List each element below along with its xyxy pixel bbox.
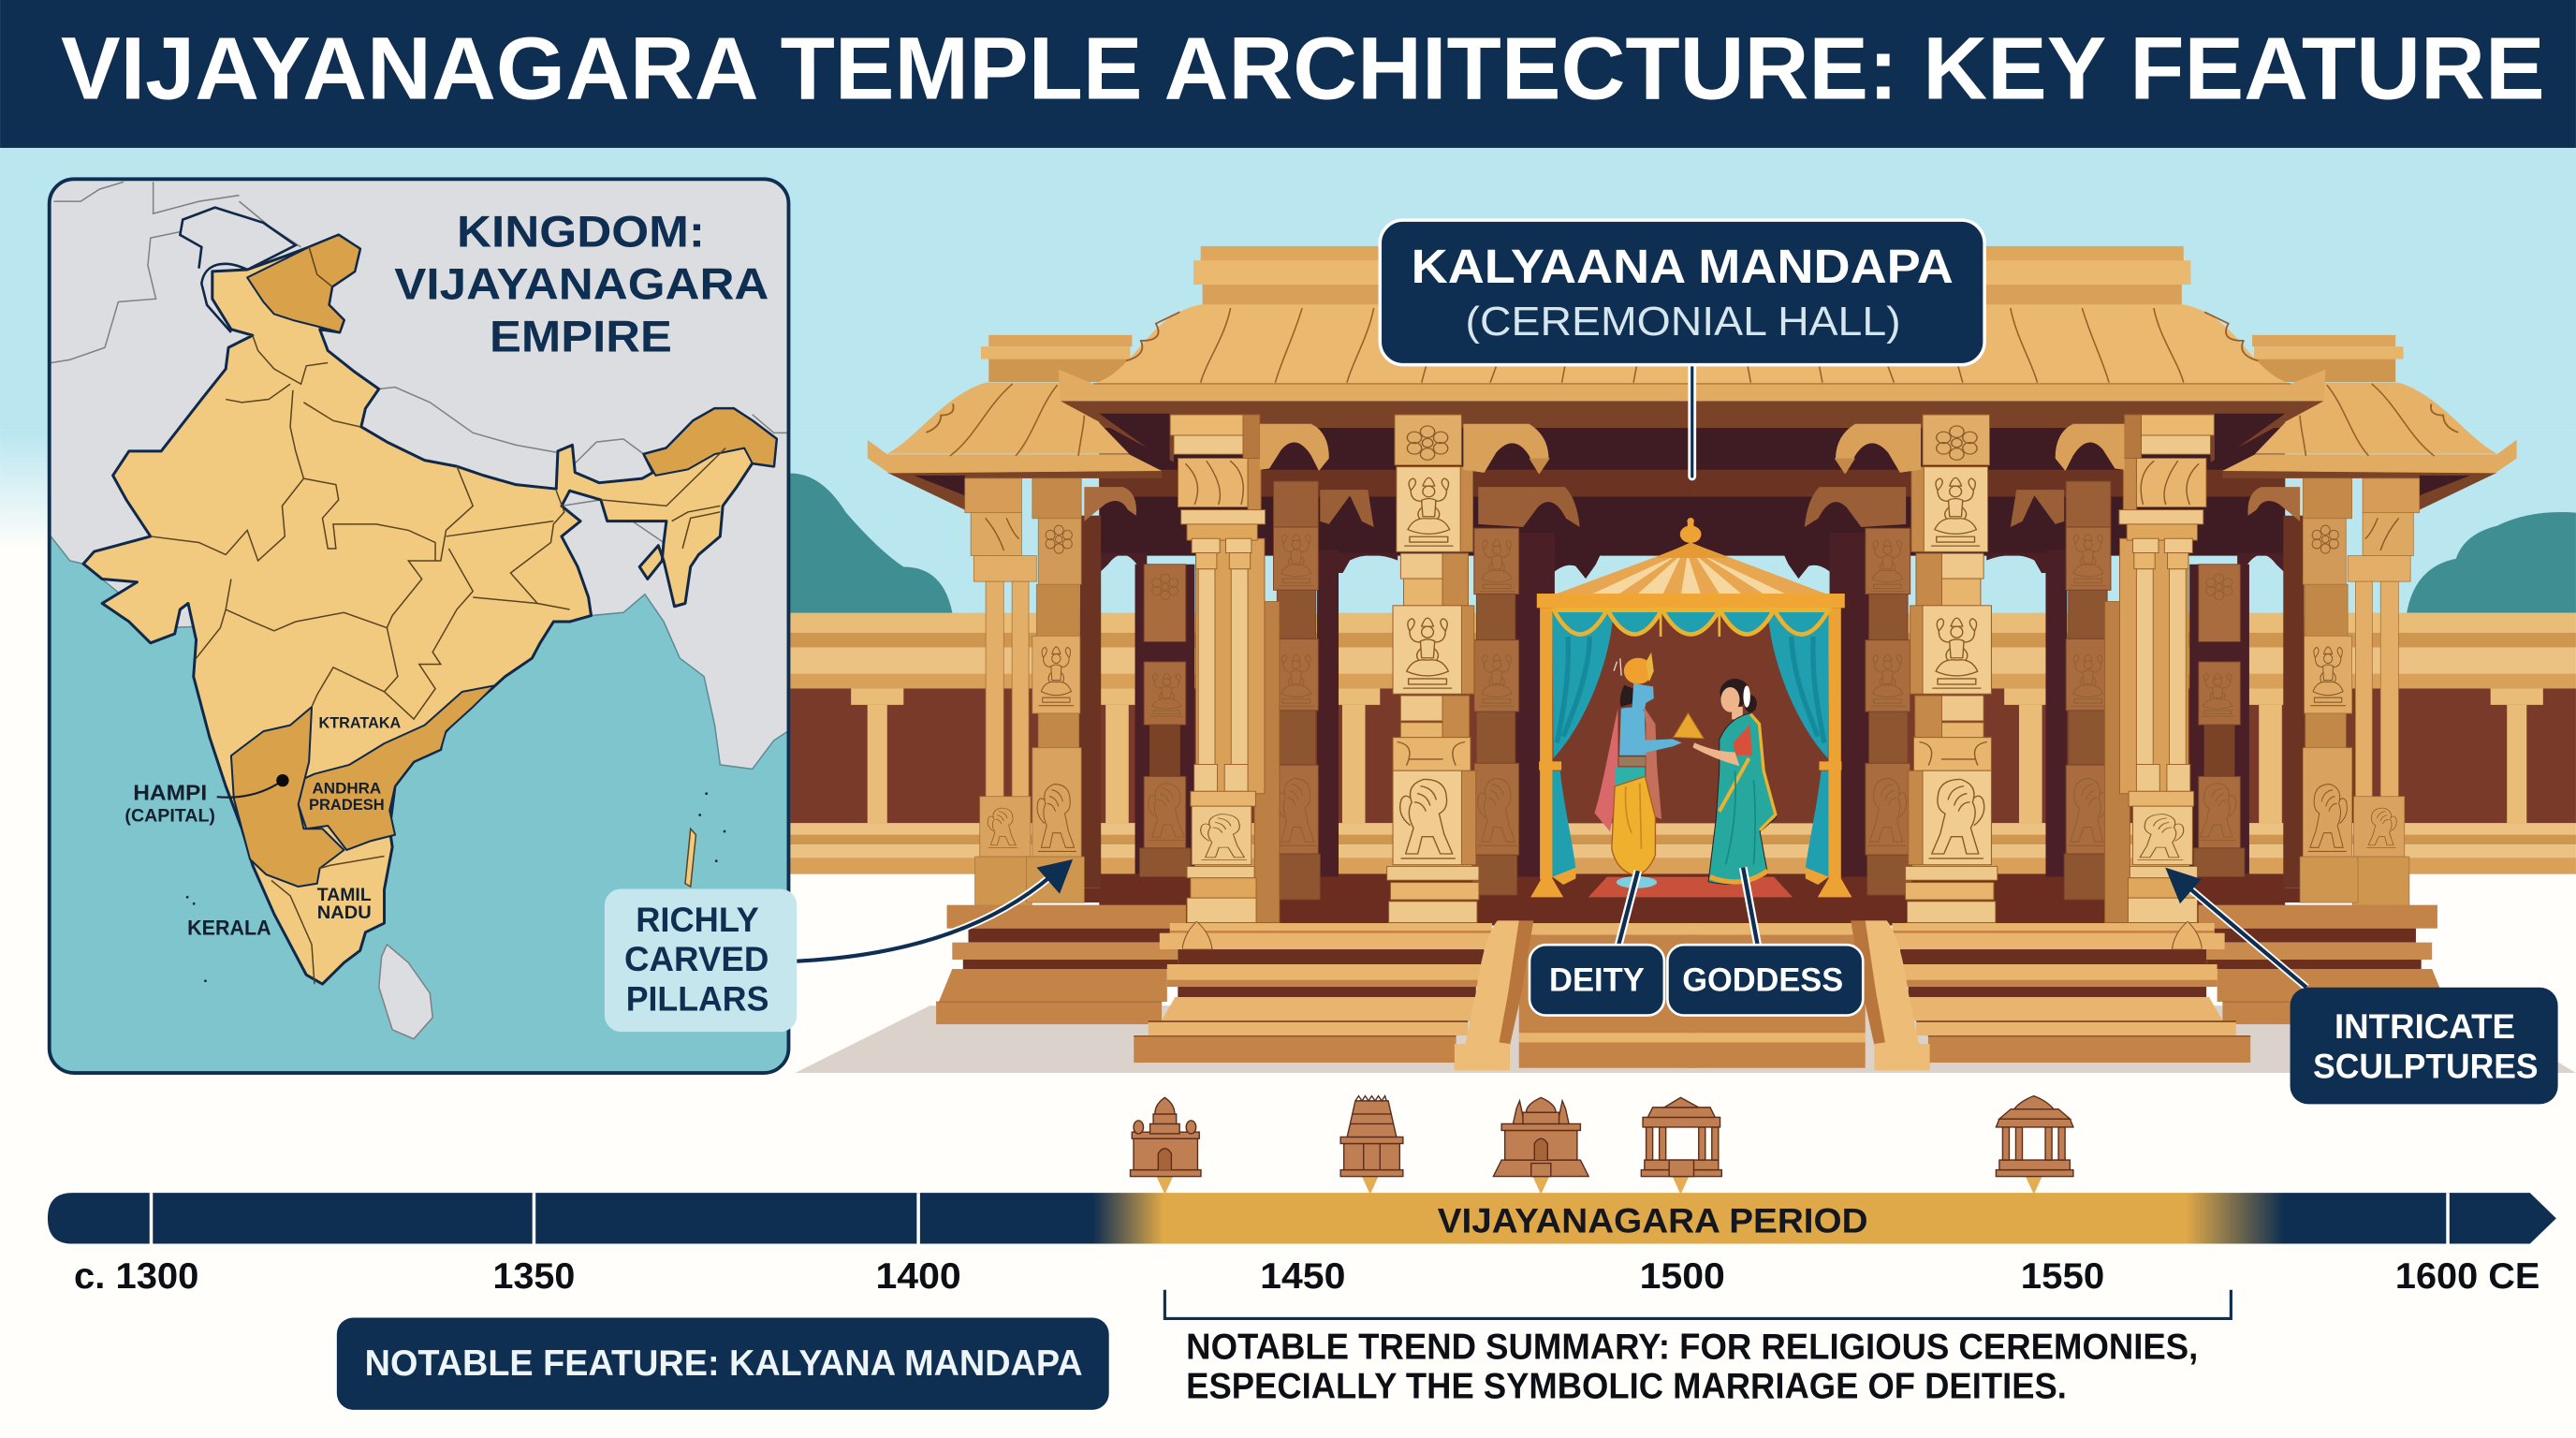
callout: kalyaana mandapa connector bbox=[1690, 365, 1694, 477]
map labels: HAMPI bbox=[133, 781, 207, 805]
map heading: VIJAYANAGARA bbox=[394, 259, 768, 309]
arrow: intricate sculptures bbox=[2165, 868, 2306, 988]
island dots bbox=[186, 792, 725, 982]
timeline year labels: 1500 bbox=[1640, 1256, 1725, 1297]
map heading bbox=[394, 207, 768, 362]
vijayanagara period label: VIJAYANAGARA PERIOD bbox=[1438, 1201, 1868, 1240]
notable feature box bbox=[337, 1318, 1109, 1410]
timeline ticks bbox=[150, 1193, 2450, 1244]
map labels: ANDHRA bbox=[313, 780, 381, 798]
sky bbox=[0, 148, 2576, 620]
label: deity bbox=[1530, 945, 1664, 1016]
red carpet bbox=[1588, 877, 1793, 897]
label: goddess bbox=[1667, 945, 1863, 1016]
notable trend summary bbox=[1186, 1327, 2198, 1407]
map labels: KTRATAKA bbox=[319, 713, 401, 731]
sea bbox=[46, 534, 793, 1076]
timeline year labels: 1450 bbox=[1260, 1256, 1345, 1297]
pointer: goddess bbox=[1743, 868, 1758, 946]
highlighted regions bbox=[231, 235, 777, 887]
icon: temple 4 bbox=[1641, 1097, 1721, 1177]
neighbouring borders bbox=[51, 182, 790, 542]
map labels: NADU bbox=[317, 903, 372, 923]
header bar bbox=[0, 0, 2576, 148]
india landmass bbox=[83, 235, 777, 984]
icon pointers bbox=[1157, 1177, 2042, 1195]
ground shadow bbox=[795, 1005, 2576, 1073]
icon: temple 5 bbox=[1996, 1096, 2073, 1177]
title: VIJAYANAGARA TEMPLE ARCHITECTURE: KEY FEATURE bbox=[61, 19, 2545, 118]
interior wall bbox=[1552, 609, 1830, 823]
timeline year labels: 1400 bbox=[875, 1256, 961, 1297]
timeline year labels: c. 1300 bbox=[74, 1256, 198, 1297]
callout: intricate sculptures bbox=[2291, 988, 2558, 1104]
timeline year labels: 1550 bbox=[2021, 1256, 2104, 1297]
timeline year labels: 1600 CE bbox=[2395, 1256, 2539, 1297]
timeline year labels: 1350 bbox=[493, 1256, 575, 1297]
andaman islands bbox=[685, 829, 695, 887]
notable trend summary: ESPECIALLY THE SYMBOLIC MARRIAGE OF DEITIES. bbox=[1186, 1367, 2067, 1407]
notable feature box: NOTABLE FEATURE: KALYANA MANDAPA bbox=[365, 1343, 1083, 1384]
callout: kalyaana mandapa: (CEREMONIAL HALL) bbox=[1466, 299, 1901, 345]
timeline bar bbox=[48, 1193, 2556, 1244]
map labels bbox=[124, 713, 401, 940]
callout: intricate sculptures: SCULPTURES bbox=[2313, 1047, 2539, 1085]
deity figure bbox=[1594, 653, 1682, 888]
hampi marker bbox=[217, 774, 289, 798]
callout: kalyaana mandapa: KALYAANA MANDAPA bbox=[1412, 240, 1954, 293]
map panel frame bbox=[50, 179, 788, 1073]
goddess figure bbox=[1692, 679, 1776, 884]
map labels: PRADESH bbox=[309, 796, 385, 814]
map heading: EMPIRE bbox=[490, 313, 672, 362]
label: goddess: GODDESS bbox=[1682, 961, 1843, 998]
kashmir outline bbox=[180, 208, 296, 332]
map labels: (CAPITAL) bbox=[124, 807, 215, 827]
temple steps left bbox=[936, 905, 1696, 1070]
state borders bbox=[151, 247, 725, 984]
icon: temple 3 bbox=[1493, 1097, 1588, 1177]
callout: richly carved pillars: CARVED bbox=[624, 940, 768, 978]
notable trend summary: NOTABLE TREND SUMMARY: FOR RELIGIOUS CEREMONIES, bbox=[1186, 1327, 2198, 1367]
callout: richly carved pillars bbox=[605, 888, 797, 1032]
timeline year labels bbox=[74, 1256, 2539, 1297]
bushes bbox=[790, 473, 2576, 616]
background colonnade wall bbox=[790, 613, 2576, 874]
sri lanka bbox=[379, 945, 432, 1039]
icon: temple 2 bbox=[1340, 1096, 1403, 1177]
arrow: richly carved pillars bbox=[797, 859, 1073, 961]
temple: kalyana mandapa bbox=[868, 246, 2517, 1070]
callout: intricate sculptures: INTRICATE bbox=[2334, 1007, 2515, 1046]
canopy frame bbox=[1530, 594, 1852, 897]
icon: temple 1 bbox=[1131, 1097, 1201, 1177]
callout: kalyaana mandapa bbox=[1380, 220, 1984, 365]
temple right half bbox=[1690, 246, 2517, 926]
period bracket bbox=[1164, 1290, 2231, 1318]
right curtain bbox=[1768, 613, 1829, 885]
left curtain bbox=[1552, 613, 1613, 885]
label: deity: DEITY bbox=[1549, 961, 1645, 998]
callout: richly carved pillars: RICHLY bbox=[636, 901, 759, 939]
pointer: deity bbox=[1618, 871, 1638, 946]
golden offering bbox=[1674, 713, 1704, 739]
wedding canopy and figures bbox=[1530, 518, 1852, 897]
temple steps right bbox=[1688, 905, 2448, 1070]
valance bbox=[1554, 610, 1828, 637]
temple left half bbox=[868, 246, 1694, 926]
map labels: TAMIL bbox=[317, 886, 372, 905]
map heading: KINGDOM: bbox=[457, 207, 705, 257]
map panel bbox=[46, 179, 793, 1076]
map labels: KERALA bbox=[187, 917, 271, 940]
canopy roof bbox=[1557, 518, 1825, 594]
callout: richly carved pillars: PILLARS bbox=[626, 979, 768, 1018]
